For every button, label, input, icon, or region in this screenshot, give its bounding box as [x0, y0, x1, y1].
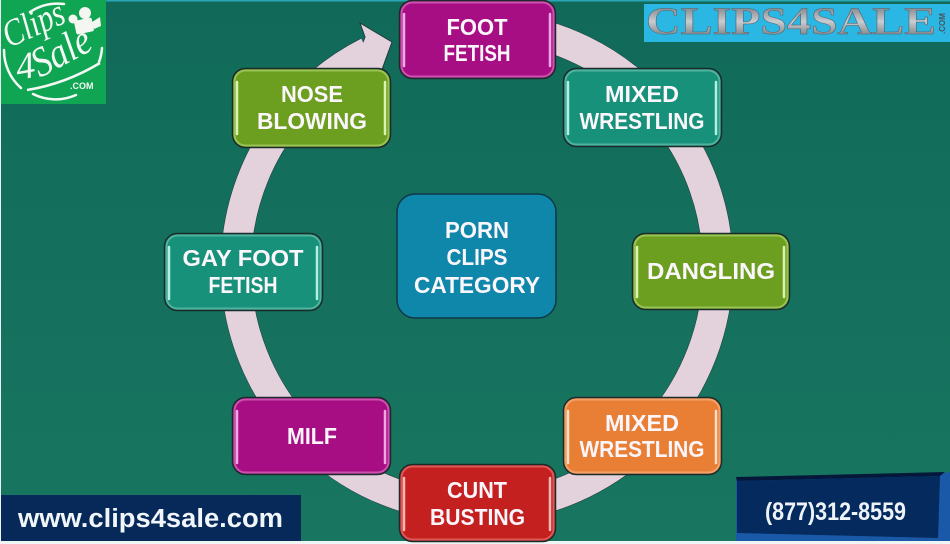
box: foot fetish: FETISH [444, 40, 510, 66]
banner: website url [1, 495, 301, 541]
box: mixed wrestling orange [564, 398, 722, 474]
box: nose blowing [232, 68, 390, 148]
box: mixed wrestling teal: MIXED [605, 81, 679, 107]
box: mixed wrestling teal [564, 68, 722, 146]
box: dangling: DANGLING [647, 258, 775, 284]
icon: movie camera [68, 7, 101, 35]
box: foot fetish [400, 0, 556, 78]
center box: porn clips category [397, 194, 556, 318]
box: gay foot fetish: FETISH [208, 272, 278, 298]
box: foot fetish: FOOT [446, 14, 508, 40]
box: cunt busting [400, 464, 556, 542]
box: cunt busting: BUSTING [430, 504, 525, 530]
box: mixed wrestling orange: WRESTLING [580, 436, 704, 462]
box: mixed wrestling orange: MIXED [605, 410, 679, 436]
box: nose blowing: BLOWING [257, 108, 367, 134]
banner: phone number [736, 472, 950, 541]
box: gay foot fetish [164, 234, 322, 310]
center box: porn clips category: CLIPS [446, 244, 508, 270]
logo: clips 4 sale badge: 4 [12, 44, 38, 89]
banner: phone number: (877)312-8559 [765, 498, 906, 526]
box: milf [232, 398, 390, 474]
logo: clips 4 sale badge: .COM [70, 81, 94, 91]
box: nose blowing: NOSE [281, 81, 343, 107]
banner: clips4sale wordmark: .COM [938, 13, 947, 34]
banner: website url: www.clips4sale.com [17, 505, 283, 533]
banner: clips4sale wordmark: CLIPS4SALE [646, 0, 936, 43]
box: milf: MILF [287, 423, 337, 449]
box: gay foot fetish: GAY FOOT [182, 245, 304, 271]
box: dangling [632, 234, 790, 310]
logo: clips 4 sale badge [0, 0, 106, 104]
box: mixed wrestling teal: WRESTLING [580, 108, 704, 134]
center box: porn clips category: PORN [445, 217, 509, 243]
logo: clips 4 sale badge: Sale [23, 17, 99, 87]
circular arrow ring [236, 23, 718, 508]
box: cunt busting: CUNT [447, 477, 508, 503]
center box: porn clips category: CATEGORY [414, 272, 540, 298]
